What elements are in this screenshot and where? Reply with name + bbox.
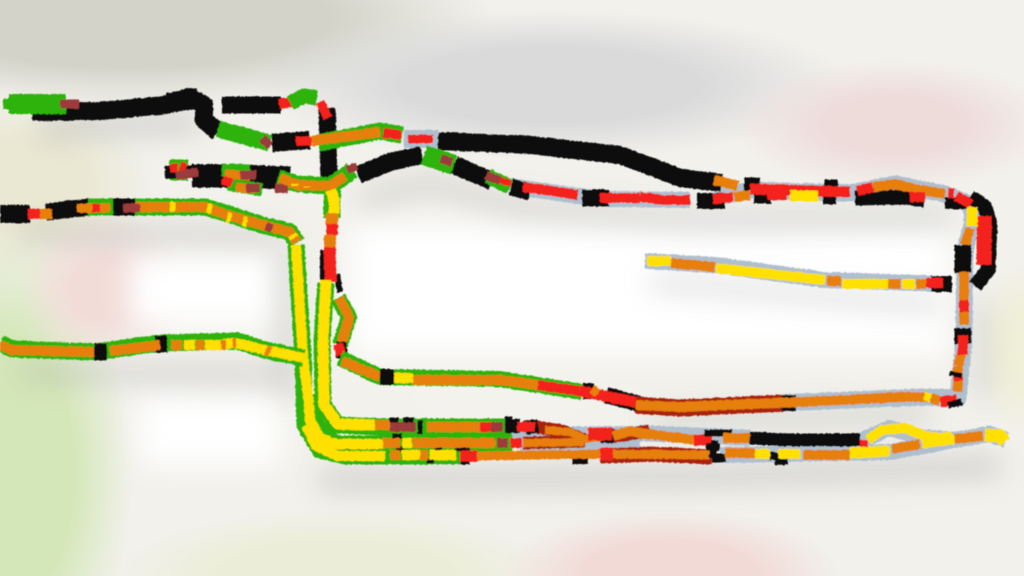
route: knot and junction [165,165,357,292]
route: top long black to east [438,141,990,286]
route: top left black and green [3,96,433,180]
route halos [404,139,1006,455]
route: west line with orange [0,207,297,243]
route: eastern south lines [640,428,1005,460]
route: middle southern line [336,272,964,408]
map routes [0,96,1006,461]
route: southern bundle [375,419,712,461]
route: yellow spur [647,261,952,284]
route: middle black and red [358,155,640,198]
route: yellow north-south trunks [296,245,512,456]
route: south-west line [0,341,304,358]
